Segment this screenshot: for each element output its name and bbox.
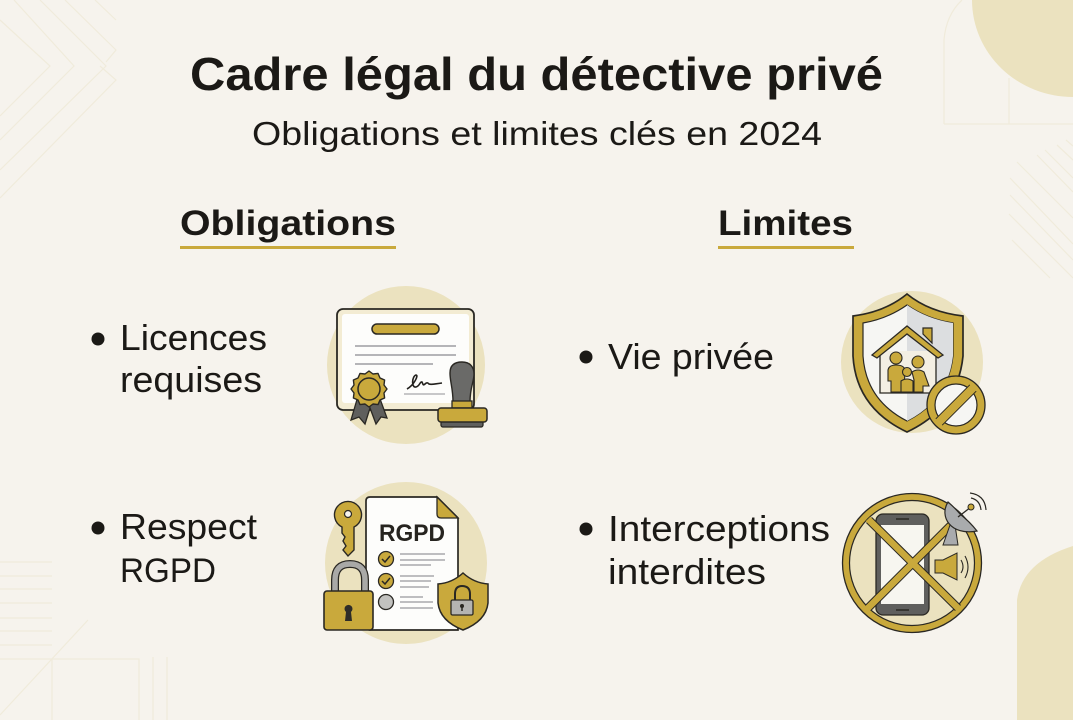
icon: RGPD document with key, padlock and shield: [324, 482, 488, 644]
list item: Interceptions interdites: [580, 508, 830, 592]
heading: Obligations: Obligations: [180, 204, 396, 243]
icon: RGPD document with key, padlock and shield: RGPD: [379, 520, 445, 547]
list item: Respect RGPD: RGPD: [120, 552, 216, 590]
icon: certificate with seal and stamp: [327, 286, 487, 444]
list item: Respect RGPD: Respect: [120, 506, 257, 547]
icon: shield with family house and prohibition sign: [841, 291, 985, 434]
list item: Interceptions interdites: interdites: [608, 551, 766, 592]
list item: Licences requises: requises: [120, 359, 262, 400]
list item: Licences requises: Licences: [120, 317, 267, 358]
title: Cadre légal du détective privé: [190, 48, 883, 100]
heading: Limites: Limites: [718, 204, 853, 243]
icon: crossed-out phone, satellite dish and speaker: [842, 493, 986, 632]
list item: Interceptions interdites: Interceptions: [608, 508, 830, 549]
list item: Respect RGPD: [92, 506, 257, 590]
decoration: bottom-right arch: [1017, 546, 1073, 720]
list item: Licences requises: [92, 317, 267, 400]
subtitle: Obligations et limites clés en 2024: [252, 115, 822, 152]
list item: Vie privée: Vie privée: [608, 336, 774, 377]
decoration: top-right circle: [972, 0, 1073, 97]
